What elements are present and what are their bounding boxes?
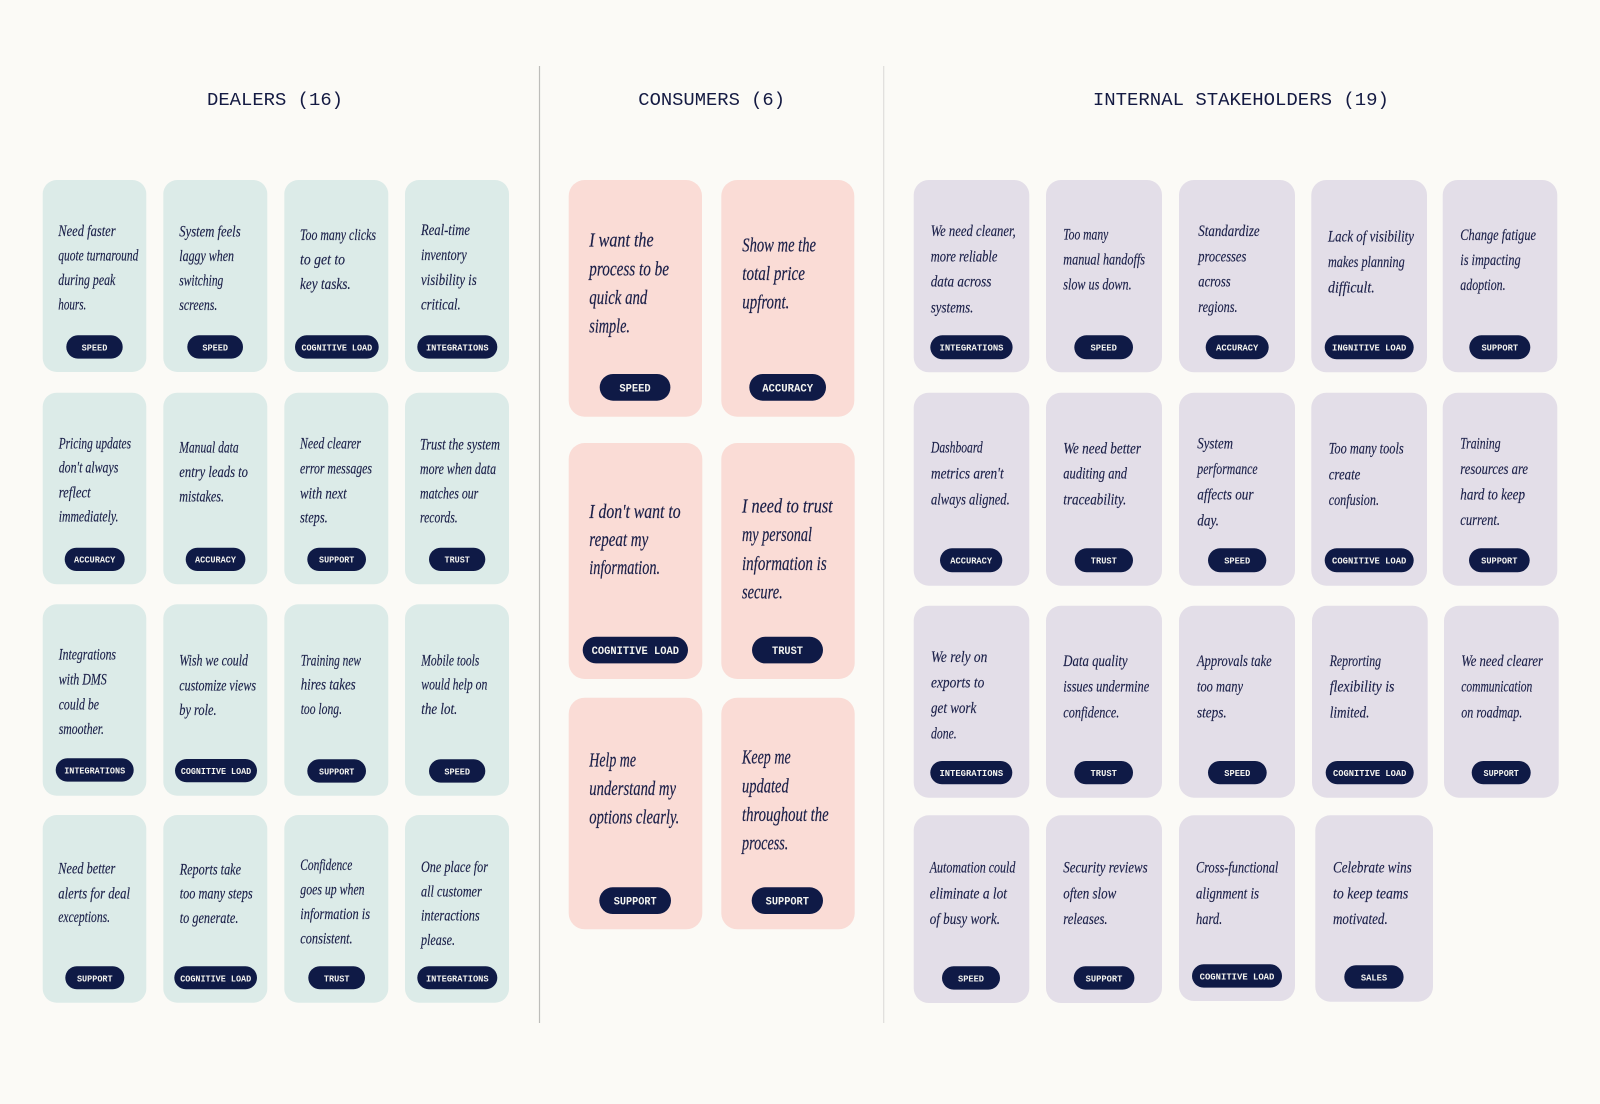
- card: keep me updated: process.: [741, 833, 788, 854]
- card: data quality: [1046, 606, 1162, 798]
- card: real-time inventory: inventory: [421, 247, 467, 264]
- card: cleaner data: We need cleaner,: [931, 223, 1016, 240]
- card: need faster quote turnaround: during peak: [58, 272, 116, 289]
- card: total price upfront: upfront.: [742, 292, 789, 313]
- card: repeat my information: repeat my: [589, 530, 649, 551]
- card: celebrate wins: [1315, 815, 1433, 1002]
- card: cleaner data: [914, 180, 1029, 372]
- card: celebrate wins: SALES: [1361, 972, 1387, 983]
- card: system performance: performance: [1197, 461, 1258, 478]
- card: confidence goes up: goes up when: [300, 881, 365, 898]
- card: better alerts: alerts for deal: [58, 885, 130, 902]
- card: too many clicks: key tasks.: [300, 276, 351, 293]
- card: rely on exports: exports to: [931, 674, 984, 691]
- card: quick and simple: process to be: [588, 259, 669, 280]
- card: system performance: [1179, 393, 1295, 586]
- card: clearer error messages: with next: [300, 485, 347, 502]
- card: customize views: [163, 604, 267, 796]
- card: integrations with DMS: smoother.: [59, 721, 104, 738]
- card: system feels laggy: [163, 180, 267, 372]
- card: training new hires: hires takes: [301, 677, 356, 694]
- card: real-time inventory: INTEGRATIONS: [426, 342, 489, 353]
- card: change fatigue: Change fatigue: [1460, 227, 1536, 244]
- heading: internal stakeholders: INTERNAL STAKEHOLDERS (19): [1093, 90, 1389, 111]
- card: lack of visibility: INGNITIVE LOAD: [1332, 342, 1407, 353]
- card: auditing and traceability: auditing and: [1063, 466, 1128, 483]
- card: too many clicks: to get to: [300, 251, 345, 268]
- card: pricing updates: don't always: [59, 460, 118, 477]
- card: quick and simple: SPEED: [619, 383, 651, 395]
- card: roadmap communication: communication: [1461, 679, 1532, 696]
- card: system feels laggy: screens.: [179, 297, 217, 314]
- card: change fatigue: SUPPORT: [1481, 342, 1518, 353]
- card: data quality: Data quality: [1063, 653, 1128, 670]
- card: reporting flexibility: flexibility is: [1330, 679, 1394, 696]
- card: repeat my information: [569, 443, 702, 679]
- card: auditing and traceability: We need better: [1063, 440, 1142, 457]
- card: dashboard metrics: always aligned.: [931, 491, 1010, 508]
- card: customize views: COGNITIVE LOAD: [181, 766, 251, 777]
- card: training resources: SUPPORT: [1481, 556, 1518, 567]
- card: too many tools: create: [1329, 466, 1360, 483]
- card: reports take too many steps: Reports take: [179, 861, 241, 878]
- card: auditing and traceability: [1046, 393, 1162, 586]
- card: too many tools: COGNITIVE LOAD: [1332, 556, 1407, 567]
- card: reporting flexibility: limited.: [1330, 704, 1369, 721]
- card: clearer error messages: SUPPORT: [319, 555, 355, 566]
- card: security reviews: releases.: [1063, 911, 1108, 928]
- card: automation: Automation could: [929, 860, 1016, 877]
- card: mobile tools: Mobile tools: [421, 652, 479, 669]
- card: quick and simple: [569, 180, 702, 417]
- card: too many tools: [1311, 393, 1427, 586]
- card: cross-functional alignment: COGNITIVE LOAD: [1200, 971, 1275, 982]
- card: manual data entry: entry leads to: [179, 464, 248, 481]
- card: real-time inventory: visibility is: [421, 272, 477, 289]
- card: automation: of busy work.: [930, 911, 1000, 928]
- card: one place for all interactions: One place for: [421, 859, 489, 876]
- card: understand my options: [569, 698, 702, 929]
- card: celebrate wins: Celebrate wins: [1333, 860, 1412, 877]
- card: change fatigue: adoption.: [1460, 277, 1506, 294]
- card: personal information secure: my personal: [742, 525, 812, 546]
- card: need faster quote turnaround: [43, 180, 146, 372]
- card: too many tools: confusion.: [1329, 492, 1379, 509]
- card: lack of visibility: Lack of visibility: [1327, 228, 1415, 245]
- card: total price upfront: Show me the: [742, 235, 816, 256]
- card: manual handoffs: [1046, 180, 1162, 372]
- card: total price upfront: [721, 180, 854, 417]
- card: standardize processes: ACCURACY: [1216, 342, 1259, 353]
- card: reporting flexibility: COGNITIVE LOAD: [1333, 768, 1407, 779]
- card: manual handoffs: manual handoffs: [1063, 252, 1145, 269]
- card: cleaner data: more reliable: [931, 248, 997, 265]
- card: one place for all interactions: interactions: [421, 908, 480, 925]
- card: automation: [914, 815, 1029, 1003]
- card: data quality: issues undermine: [1063, 679, 1149, 696]
- card: standardize processes: [1179, 180, 1295, 372]
- card: system feels laggy: System feels: [179, 224, 241, 241]
- card: confidence goes up: [284, 815, 388, 1003]
- card: total price upfront: total price: [742, 264, 805, 285]
- card: confidence goes up: Confidence: [300, 857, 352, 874]
- card: roadmap communication: [1444, 606, 1559, 798]
- card: standardize processes: processes: [1198, 249, 1246, 266]
- card: approvals take too many steps: Approvals take: [1196, 653, 1272, 670]
- card: change fatigue: [1443, 180, 1557, 372]
- card: better alerts: exceptions.: [58, 909, 110, 926]
- card: trust the system: TRUST: [445, 555, 470, 566]
- card: pricing updates: [43, 393, 146, 584]
- card: reports take too many steps: to generate.: [180, 910, 238, 927]
- card: one place for all interactions: all customer: [421, 883, 482, 900]
- card: auditing and traceability: TRUST: [1091, 556, 1117, 567]
- card: total price upfront: ACCURACY: [762, 383, 814, 395]
- card: automation: eliminate a lot: [930, 885, 1007, 902]
- card: understand my options: understand my: [589, 779, 676, 800]
- card: trust the system: matches our: [420, 485, 479, 502]
- card: too many clicks: Too many clicks: [300, 227, 376, 244]
- card: celebrate wins: motivated.: [1333, 911, 1388, 928]
- card: cross-functional alignment: Cross-functional: [1196, 860, 1279, 877]
- card: training new hires: [284, 604, 388, 796]
- card: real-time inventory: critical.: [421, 296, 461, 313]
- card: security reviews: [1046, 815, 1162, 1003]
- card: trust the system: more when data: [420, 461, 496, 478]
- card: personal information secure: secure.: [742, 582, 783, 603]
- card: dashboard metrics: metrics aren't: [931, 466, 1004, 483]
- card: pricing updates: immediately.: [59, 509, 118, 526]
- card: system performance: day.: [1197, 512, 1219, 529]
- card: better alerts: SUPPORT: [77, 973, 113, 984]
- panel: consumers: [569, 90, 855, 929]
- card: cross-functional alignment: [1179, 815, 1295, 1001]
- card: confidence goes up: TRUST: [324, 973, 350, 984]
- card: quick and simple: simple.: [589, 316, 630, 337]
- card: quick and simple: I want the: [588, 231, 654, 252]
- card: mobile tools: SPEED: [444, 766, 470, 777]
- card: system feels laggy: laggy when: [179, 248, 234, 265]
- card: dashboard metrics: ACCURACY: [950, 556, 992, 567]
- card: manual data entry: mistakes.: [179, 488, 224, 505]
- card: pricing updates: ACCURACY: [74, 555, 116, 566]
- heading: dealers: DEALERS (16): [207, 90, 343, 111]
- card: trust the system: Trust the system: [420, 436, 500, 453]
- card: keep me updated: [721, 698, 855, 929]
- card: security reviews: often slow: [1063, 885, 1117, 902]
- card: repeat my information: I don't want to: [588, 502, 681, 523]
- card: customize views: by role.: [179, 702, 217, 719]
- card: understand my options: options clearly.: [589, 807, 679, 828]
- card: auditing and traceability: traceability.: [1063, 491, 1126, 508]
- card: manual handoffs: slow us down.: [1063, 276, 1132, 293]
- card: keep me updated: throughout the: [742, 805, 829, 826]
- card: customize views: customize views: [179, 678, 256, 695]
- panel: internal stakeholders: [914, 90, 1559, 1003]
- heading: consumers: CONSUMERS (6): [638, 90, 785, 111]
- card: integrations with DMS: with DMS: [59, 672, 107, 689]
- card: need faster quote turnaround: quote turnaround: [58, 248, 139, 265]
- card: one place for all interactions: please.: [420, 932, 455, 949]
- card: data quality: confidence.: [1063, 704, 1119, 721]
- card: keep me updated: SUPPORT: [766, 897, 809, 909]
- card: reporting flexibility: Reprorting: [1329, 653, 1381, 670]
- card: rely on exports: We rely on: [931, 649, 987, 666]
- card: lack of visibility: [1311, 180, 1427, 372]
- card: reports take too many steps: COGNITIVE LOAD: [180, 973, 251, 984]
- card: rely on exports: [914, 606, 1029, 798]
- card: roadmap communication: We need clearer: [1461, 653, 1544, 670]
- card: clearer error messages: error messages: [300, 460, 372, 477]
- card: one place for all interactions: [405, 815, 509, 1003]
- card: training resources: [1443, 393, 1557, 586]
- card: pricing updates: Pricing updates: [58, 435, 131, 452]
- card: confidence goes up: information is: [300, 906, 370, 923]
- card: personal information secure: TRUST: [772, 646, 803, 658]
- card: rely on exports: get work: [931, 700, 977, 717]
- card: pricing updates: reflect: [59, 484, 91, 501]
- card: better alerts: Need better: [58, 861, 116, 878]
- card: dashboard metrics: [914, 393, 1029, 586]
- card: trust the system: [405, 393, 509, 584]
- card: security reviews: SUPPORT: [1086, 973, 1123, 984]
- card: confidence goes up: consistent.: [300, 930, 353, 947]
- card: training new hires: Training new: [301, 652, 361, 669]
- card: quick and simple: quick and: [589, 288, 647, 309]
- card: mobile tools: [405, 604, 509, 796]
- card: better alerts: [43, 815, 146, 1003]
- card: mobile tools: would help on: [421, 677, 487, 694]
- card: mobile tools: the lot.: [421, 701, 457, 718]
- card: cleaner data: systems.: [931, 299, 973, 316]
- card: training new hires: SUPPORT: [319, 766, 355, 777]
- card: one place for all interactions: INTEGRATIONS: [426, 973, 489, 984]
- card: security reviews: Security reviews: [1063, 860, 1148, 877]
- card: standardize processes: across: [1198, 274, 1231, 291]
- card: repeat my information: COGNITIVE LOAD: [592, 646, 679, 658]
- card: dashboard metrics: Dashboard: [930, 440, 983, 457]
- card: celebrate wins: to keep teams: [1333, 885, 1408, 902]
- card: change fatigue: is impacting: [1460, 252, 1521, 269]
- card: manual handoffs: Too many: [1063, 226, 1109, 243]
- card: standardize processes: regions.: [1198, 299, 1238, 316]
- card: need faster quote turnaround: SPEED: [82, 342, 108, 353]
- card: approvals take too many steps: too many: [1197, 679, 1244, 696]
- card: too many clicks: COGNITIVE LOAD: [301, 342, 372, 353]
- card: reports take too many steps: too many steps: [180, 886, 253, 903]
- card: rely on exports: INTEGRATIONS: [939, 768, 1003, 779]
- card: manual data entry: ACCURACY: [195, 555, 236, 566]
- card: training resources: current.: [1460, 512, 1500, 529]
- card: real-time inventory: [405, 180, 509, 372]
- card: reporting flexibility: [1312, 606, 1428, 798]
- card: training resources: hard to keep: [1460, 486, 1525, 503]
- card: clearer error messages: Need clearer: [299, 436, 362, 453]
- card: reports take too many steps: [163, 815, 267, 1003]
- card: training resources: resources are: [1460, 461, 1528, 478]
- card: cross-functional alignment: alignment is: [1196, 885, 1259, 902]
- card: real-time inventory: Real-time: [420, 222, 470, 239]
- card: too many clicks: [284, 180, 388, 372]
- card: system performance: System: [1197, 436, 1233, 453]
- card: need faster quote turnaround: Need faster: [58, 223, 116, 240]
- card: roadmap communication: on roadmap.: [1461, 704, 1522, 721]
- card: understand my options: Help me: [589, 751, 636, 772]
- card: standardize processes: Standardize: [1198, 223, 1260, 240]
- panel: dealers: [43, 90, 509, 1003]
- card: lack of visibility: makes planning: [1328, 254, 1405, 271]
- card: training resources: Training: [1460, 436, 1501, 453]
- card: cross-functional alignment: hard.: [1196, 911, 1222, 928]
- card: system performance: affects our: [1197, 487, 1254, 504]
- card: integrations with DMS: [43, 604, 146, 796]
- card: approvals take too many steps: [1179, 606, 1295, 798]
- card: cleaner data: data across: [931, 274, 991, 291]
- card: integrations with DMS: could be: [59, 697, 99, 714]
- card: clearer error messages: [284, 393, 388, 584]
- card: automation: SPEED: [958, 973, 984, 984]
- card: clearer error messages: steps.: [300, 510, 328, 527]
- card: customize views: Wish we could: [179, 652, 249, 669]
- card: approvals take too many steps: steps.: [1197, 704, 1227, 721]
- card: too many tools: Too many tools: [1329, 441, 1404, 458]
- card: trust the system: records.: [420, 510, 458, 527]
- card: data quality: TRUST: [1091, 768, 1117, 779]
- card: personal information secure: I need to trust: [741, 497, 833, 518]
- card: manual handoffs: SPEED: [1091, 342, 1117, 353]
- card: lack of visibility: difficult.: [1328, 280, 1375, 297]
- card: training new hires: too long.: [301, 701, 342, 718]
- card: rely on exports: done.: [931, 725, 957, 742]
- card: keep me updated: Keep me: [741, 748, 791, 769]
- card: integrations with DMS: Integrations: [58, 646, 116, 663]
- card: personal information secure: [721, 443, 855, 679]
- card: roadmap communication: SUPPORT: [1484, 768, 1519, 779]
- card: system feels laggy: SPEED: [202, 342, 228, 353]
- card: cleaner data: INTEGRATIONS: [940, 342, 1004, 353]
- card: system performance: SPEED: [1224, 556, 1250, 567]
- card: keep me updated: updated: [742, 776, 789, 797]
- card: repeat my information: information.: [589, 558, 660, 579]
- card: approvals take too many steps: SPEED: [1224, 768, 1251, 779]
- card: personal information secure: information is: [742, 554, 827, 575]
- card: need faster quote turnaround: hours.: [58, 296, 86, 313]
- card: integrations with DMS: INTEGRATIONS: [64, 766, 125, 776]
- card: system feels laggy: switching: [179, 273, 223, 290]
- card: manual data entry: Manual data: [179, 440, 239, 457]
- card: understand my options: SUPPORT: [614, 897, 657, 909]
- card: manual data entry: [163, 393, 267, 584]
